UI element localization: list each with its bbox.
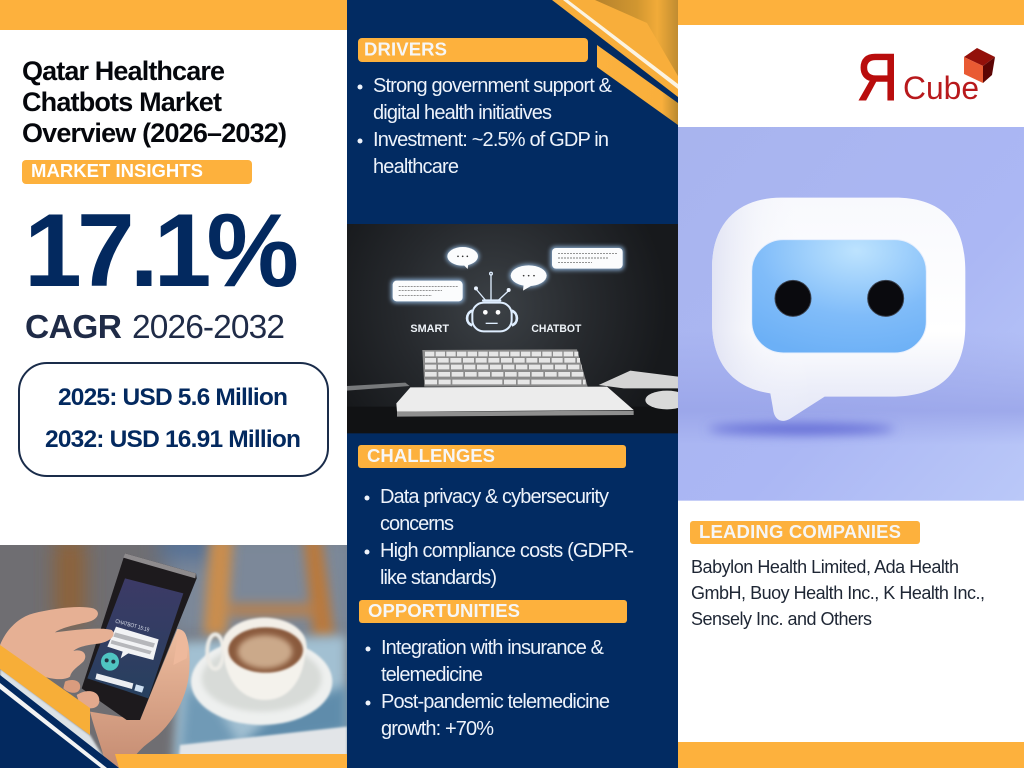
list: opportunities: Integration with insurance &: [381, 637, 605, 659]
text: company list: GmbH, Buoy Health Inc., K Health Inc.,: [691, 583, 985, 603]
logo: RCube: Я: [857, 40, 898, 114]
heading: market insights: [22, 160, 252, 184]
heading: opportunities: OPPORTUNITIES: [368, 600, 520, 621]
image: smart chatbot keyboard photo: [347, 224, 689, 433]
list: challenges: [364, 486, 634, 589]
tablet and phone: [347, 383, 410, 391]
stat: CAGR value: 17.1%: [24, 193, 299, 309]
bottom orange band right: [678, 742, 1024, 768]
panel: left column: [0, 0, 360, 768]
heading: challenges: CHALLENGES: [367, 445, 495, 466]
image: phone chatbot photo: CHATBOT 15:19: [114, 619, 150, 634]
logo: RCube: Cube: [903, 70, 979, 106]
bubbles: [391, 246, 624, 303]
list: drivers: digital health initiatives: [373, 102, 552, 124]
saucer: [191, 638, 332, 725]
text: company list: Babylon Health Limited, Ada Health: [691, 557, 959, 577]
list: opportunities: [366, 637, 610, 740]
list: drivers: Investment: ~2.5% of GDP in: [373, 129, 609, 151]
decoration: top-right gold ribbons: [552, 0, 678, 125]
callout: market size: 2032: USD 16.91 Million: [45, 426, 301, 453]
heading: opportunities: [359, 600, 627, 623]
cup: [223, 642, 306, 700]
list: opportunities: growth: +70%: [381, 718, 494, 740]
image: smart chatbot keyboard photo: SMART: [410, 323, 449, 335]
list: challenges: concerns: [380, 513, 454, 535]
list: drivers: [358, 75, 613, 178]
decoration: bottom-left orange stripe and navy corner: [0, 645, 347, 768]
top orange band right: [678, 0, 1024, 25]
list: opportunities: telemedicine: [381, 664, 483, 686]
callout: market size: [19, 363, 328, 476]
phone: [82, 553, 197, 720]
keyboard: [422, 349, 588, 387]
heading: drivers: [358, 38, 588, 62]
panel: right column: [678, 0, 1024, 768]
stat: CAGR label: 2026-2032: [132, 309, 285, 346]
heading: market insights: MARKET INSIGHTS: [31, 160, 203, 181]
heading: leading companies: LEADING COMPANIES: [699, 521, 901, 542]
list: drivers: Strong government support &: [373, 75, 613, 97]
callout: market size: 2025: USD 5.6 Million: [58, 384, 288, 411]
image: phone chatbot photo: [0, 532, 360, 768]
list: opportunities: Post-pandemic telemedicine: [381, 691, 610, 713]
heading: drivers: DRIVERS: [364, 38, 447, 60]
stat: CAGR label: CAGR: [25, 309, 122, 346]
front hand with pointing fingers: [0, 607, 114, 679]
back hand: [90, 629, 190, 768]
image: smart chatbot keyboard photo: CHATBOT: [531, 323, 582, 335]
text: company list: Sensely Inc. and Others: [691, 609, 872, 629]
heading: challenges: [358, 445, 626, 468]
phone-holding fingers: [173, 630, 188, 665]
top orange band left: [0, 0, 347, 30]
title: Chatbots Market: [22, 87, 222, 117]
title: Qatar Healthcare: [22, 56, 225, 86]
robot: [467, 272, 517, 331]
stat: CAGR label: [25, 309, 285, 346]
panel: center column: [347, 0, 689, 768]
list: challenges: Data privacy & cybersecurity: [380, 486, 609, 508]
title: Overview (2026–2032): [22, 118, 287, 148]
image: 3D chatbot speech bubble: [678, 127, 1024, 501]
logo: RCube: [857, 40, 995, 114]
list: drivers: healthcare: [373, 156, 459, 178]
list: challenges: High compliance costs (GDPR-: [380, 540, 634, 562]
text: company list: [691, 557, 985, 629]
list: challenges: like standards): [380, 567, 497, 589]
title: [22, 56, 287, 148]
